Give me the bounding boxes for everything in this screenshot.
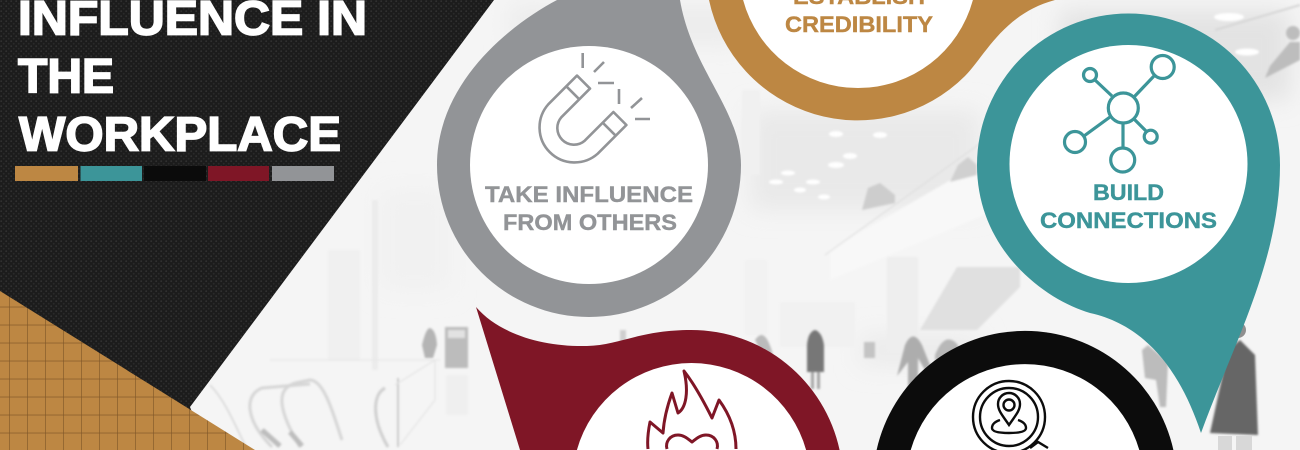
panel: take influence from others: FROM OTHERS [503, 210, 677, 235]
background: floor people [422, 327, 1168, 415]
icon: flame with heart [648, 371, 736, 449]
background: columns and balcony [328, 90, 1020, 370]
panel: establish credibility: CREDIBILITY [785, 12, 933, 37]
colour key bars [15, 166, 334, 181]
background: person in dark coat [1210, 322, 1258, 450]
panel: establish credibility [709, 0, 1055, 120]
icon: network [1064, 56, 1174, 172]
panel: passion (maroon) [476, 307, 840, 450]
panel: build connections: BUILD [1093, 180, 1164, 205]
title [18, 0, 367, 162]
title: WORKPLACE [19, 108, 341, 162]
background: ceiling lights [746, 13, 1259, 200]
gold grid triangle [0, 291, 255, 450]
panel: find your place (black) [877, 331, 1173, 450]
panel: take influence from others [437, 0, 741, 317]
panel: take influence from others: TAKE INFLUENCE [485, 182, 693, 207]
panel: build connections: CONNECTIONS [1040, 208, 1217, 233]
icon: magnet [540, 53, 650, 162]
background: balcony figure top right [1215, 5, 1300, 78]
background: escalators [210, 360, 440, 447]
panel: build connections [977, 14, 1280, 433]
title: THE [18, 50, 114, 104]
dark textured panel [0, 0, 494, 412]
icon: magnifier with map pin [973, 381, 1048, 450]
